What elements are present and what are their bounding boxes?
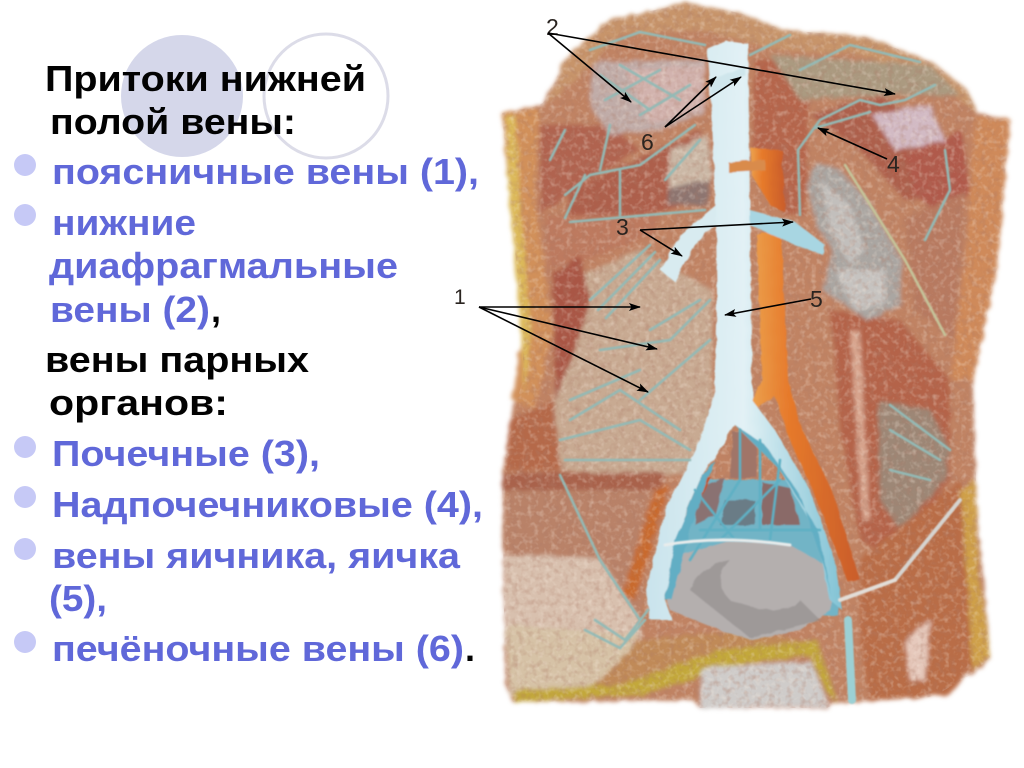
- label 5 with arrow: 5: [810, 286, 823, 312]
- gonadal arterial stub: [728, 160, 765, 172]
- pubic mottled area: [700, 662, 828, 708]
- anatomical illustration: abdominal wall tissue: [502, 3, 1010, 708]
- bullet: inferior phrenic veins: нижние: [52, 202, 196, 243]
- label 4 with arrow: 4: [887, 151, 900, 177]
- aorta upper: [750, 148, 785, 212]
- label 3 with arrows: 3: [616, 214, 629, 240]
- strap under pelvis: [590, 630, 800, 690]
- label 1 with arrows: [454, 286, 657, 392]
- text panel: tributaries list: [14, 58, 483, 669]
- left lower area: [505, 400, 560, 470]
- bullet: renal: Почечные (3),: [52, 433, 320, 474]
- subheading: paired organ veins: органов:: [49, 382, 228, 423]
- pelvic yellow band: [513, 640, 837, 703]
- left band: [502, 472, 665, 490]
- label 3 with arrows: [616, 214, 793, 256]
- kidney: [807, 163, 902, 320]
- label 2 with arrows: 2: [546, 14, 559, 40]
- background circle: filled: [121, 35, 243, 157]
- label 6 with arrows: [641, 77, 741, 155]
- right pale patch: [872, 105, 945, 150]
- subheading: paired organ veins: [45, 339, 309, 423]
- heading: [45, 58, 366, 142]
- top network haze: [770, 55, 960, 100]
- major vessels and pelvis: [646, 40, 860, 640]
- bullet: inferior phrenic veins: диафрагмальные: [49, 245, 398, 286]
- hepatic stubs: [712, 65, 745, 95]
- bullet: ovarian, testicular: [14, 535, 461, 619]
- arrows and number labels: [454, 14, 900, 392]
- tissue speckle overlay light: [500, 0, 1024, 710]
- heading: полой вены:: [50, 101, 296, 142]
- bullet: adrenal: Надпочечниковые (4),: [52, 484, 483, 525]
- left side muscle strip: [502, 108, 552, 410]
- dark gaps in pelvic network: [730, 432, 757, 478]
- bullet: lumbar veins: поясничные вены (1),: [52, 151, 479, 192]
- bullet: ovarian, testicular: вены яичника, яичка: [52, 535, 461, 576]
- subheading: paired organ veins: вены парных: [45, 339, 309, 380]
- bullet: hepatic: .: [465, 628, 475, 669]
- torso silhouette: [502, 3, 1010, 708]
- inferior vena cava: [646, 40, 842, 620]
- orange slash in pelvis: [682, 478, 712, 518]
- bullet: inferior phrenic veins: ,: [211, 289, 221, 330]
- top rim tan: [545, 3, 977, 113]
- right side muscle strip: [950, 116, 1010, 380]
- tissue speckle overlay dark: [500, 0, 1024, 710]
- iliac orange left: [622, 485, 670, 600]
- aorta lower and right iliac: [750, 232, 860, 582]
- vein network: [550, 32, 960, 700]
- mesh lower-left abdomen: [553, 250, 712, 478]
- upper red muscle patches: [540, 125, 640, 215]
- bullet: ovarian, testicular: (5),: [49, 578, 107, 619]
- bullet: inferior phrenic veins: [14, 202, 398, 330]
- bullet: inferior phrenic veins: вены (2): [50, 289, 210, 330]
- heading: Притоки нижней: [45, 58, 366, 99]
- right flank muscle: [830, 310, 950, 560]
- right oval area: [878, 400, 950, 530]
- label 5 with arrow: [725, 286, 823, 315]
- liver pale patch: [590, 60, 705, 135]
- bowel patches: [668, 170, 712, 205]
- bladder: [662, 540, 835, 640]
- bullet: hepatic: печёночные вены (6): [52, 628, 464, 669]
- background circle: outline: [264, 34, 388, 158]
- label 4 with arrow: [818, 128, 900, 177]
- renal veins: [660, 205, 716, 282]
- right lower muscle: [860, 480, 985, 700]
- label 1 with arrows: 1: [454, 286, 466, 309]
- pelvic network fill: [665, 480, 840, 615]
- iliac veins teal shading: [665, 425, 832, 600]
- label 2 with arrows: [546, 14, 895, 102]
- label 6 with arrows: 6: [641, 129, 654, 155]
